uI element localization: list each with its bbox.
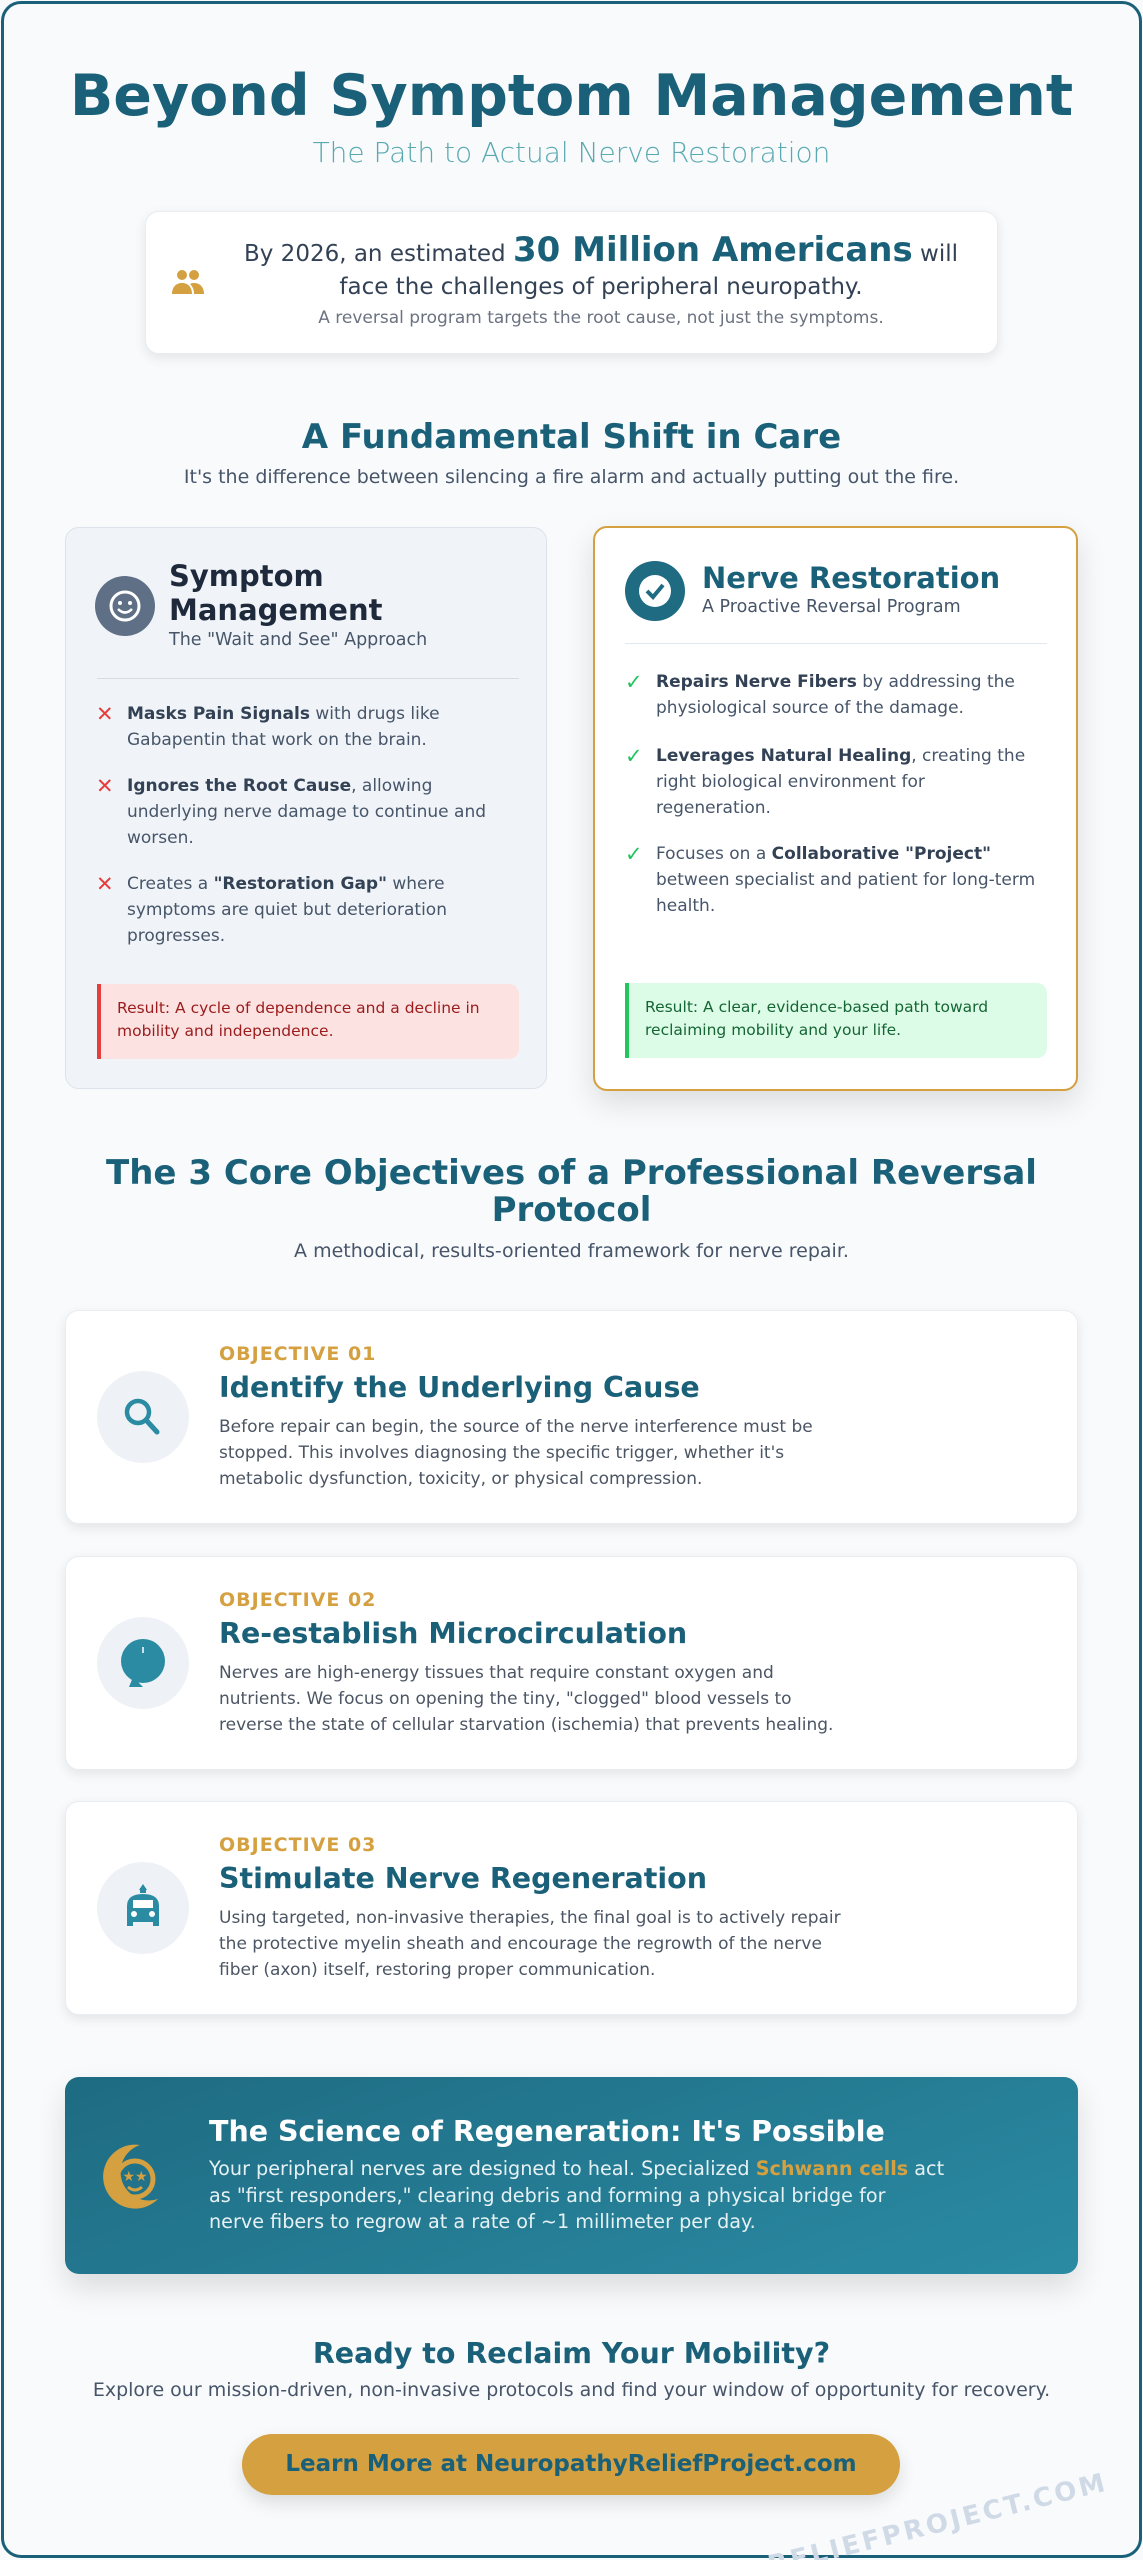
panel: symptom management [65,527,547,1089]
list: benefits [625,670,1035,916]
result callout: negative [97,984,519,1059]
panel: symptom management: Creates a "Restoration Gap" where symptoms are quiet but deterioration progresses. [127,874,447,946]
objective card 1: OBJECTIVE 01 [219,1343,376,1365]
section heading: shift in care: A Fundamental Shift in Care [302,417,841,457]
panel: symptom management: ✕ [96,774,114,798]
result callout: negative: Result: A cycle of dependence and a decline in mobility and independence. [117,999,480,1040]
objective card 1: Identify the Underlying Cause [219,1371,700,1404]
subtitle: The Path to Actual Nerve Restoration [313,136,830,169]
objective card 2: OBJECTIVE 02 [219,1589,376,1611]
section heading: objectives: Protocol [492,1190,651,1230]
objective card 1: Before repair can begin, the source of the nerve interference must be stopped. This involves diagnosing the specific trigger, whether it's metabolic dysfunction, toxicity, or physical compression. [219,1417,813,1489]
panel: symptom management: Ignores the Root Cause, allowing underlying nerve damage to continue and worsen. [127,776,486,848]
stat text: face the challenges of peripheral neuropathy. [339,274,863,300]
callout text: Your peripheral nerves are designed to heal. Specialized Schwann cells act as "first responders," clearing debris and forming a physical bridge for [209,2157,944,2206]
panel: nerve restoration: ✓ [625,842,643,866]
panel: nerve restoration: Repairs Nerve Fibers by addressing the physiological source of the damage. [656,672,1015,718]
section heading: objectives [106,1153,1037,1230]
icon: star face [103,2144,158,2209]
panel: nerve restoration: Focuses on a Collaborative "Project" between specialist and patient for long-term health. [656,844,1035,916]
panel: nerve restoration [593,526,1078,1091]
result callout: positive: Result: A clear, evidence-based path toward reclaiming mobility and your life. [645,998,988,1039]
panel: nerve restoration: ✓ [625,744,643,768]
icon: people [172,270,204,294]
science callout [65,2077,1078,2274]
stat text [244,230,958,300]
cta text: Explore our mission-driven, non-invasive protocols and find your window of opportunity for recovery. [93,2379,1050,2401]
icon: star face: ★★ [122,2169,148,2185]
panel title: Management [169,593,382,627]
objective card 2 [65,1556,1078,1770]
stat callout [145,211,998,354]
objective card 2: Re-establish Microcirculation [219,1617,687,1650]
cta button [242,2434,900,2495]
callout text [209,2157,944,2233]
panel title: Nerve Restoration [702,561,1000,595]
icon: magnifier [97,1371,189,1463]
panel subtitle: A Proactive Reversal Program [702,597,961,617]
panel: symptom management: ✕ [96,702,114,726]
panel title [169,559,382,627]
callout title: The Science of Regeneration: It's Possible [209,2115,885,2148]
title: Beyond Symptom Management [70,63,1073,129]
section heading: objectives: The 3 Core Objectives of a Professional Reversal [106,1153,1037,1193]
cta button: Learn More at NeuropathyReliefProject.com [285,2451,857,2477]
panel: nerve restoration: ✓ [625,670,643,694]
icon: ambulance [97,1862,189,1954]
panel: symptom management: Masks Pain Signals with drugs like Gabapentin that work on the brain. [127,704,440,750]
panel subtitle: The "Wait and See" Approach [169,630,427,650]
section subtitle: It's the difference between silencing a fire alarm and actually putting out the fire. [184,466,959,488]
list: drawbacks [96,702,486,946]
result callout: positive [625,983,1047,1058]
icon: check [625,561,685,621]
stat text: By 2026, an estimated 30 Million Americans will [244,230,958,270]
objective card 3: OBJECTIVE 03 [219,1834,376,1856]
objective card 1 [65,1310,1078,1524]
cta heading: Ready to Reclaim Your Mobility? [313,2337,830,2370]
panel: symptom management: ✕ [96,872,114,896]
icon: circulation [97,1617,189,1709]
panel title: Symptom [169,559,324,593]
icon: face [95,576,155,636]
section subtitle: A methodical, results-oriented framework for nerve repair. [294,1240,849,1262]
objective card 3: Stimulate Nerve Regeneration [219,1862,707,1895]
panel: nerve restoration: Leverages Natural Healing, creating the right biological environment for regeneration. [656,746,1025,818]
callout text: nerve fibers to regrow at a rate of ~1 millimeter per day. [209,2210,756,2233]
objective card 3 [65,1801,1078,2015]
objective card 3: Using targeted, non-invasive therapies, the final goal is to actively repair the protective myelin sheath and encourage the regrowth of the nerve fiber (axon) itself, restoring proper communication. [219,1908,841,1980]
objective card 2: Nerves are high-energy tissues that require constant oxygen and nutrients. We focus on opening the tiny, "clogged" blood vessels to reverse the state of cellular starvation (ischemia) that prevents healing. [219,1663,833,1735]
stat note: A reversal program targets the root cause, not just the symptoms. [318,308,884,328]
